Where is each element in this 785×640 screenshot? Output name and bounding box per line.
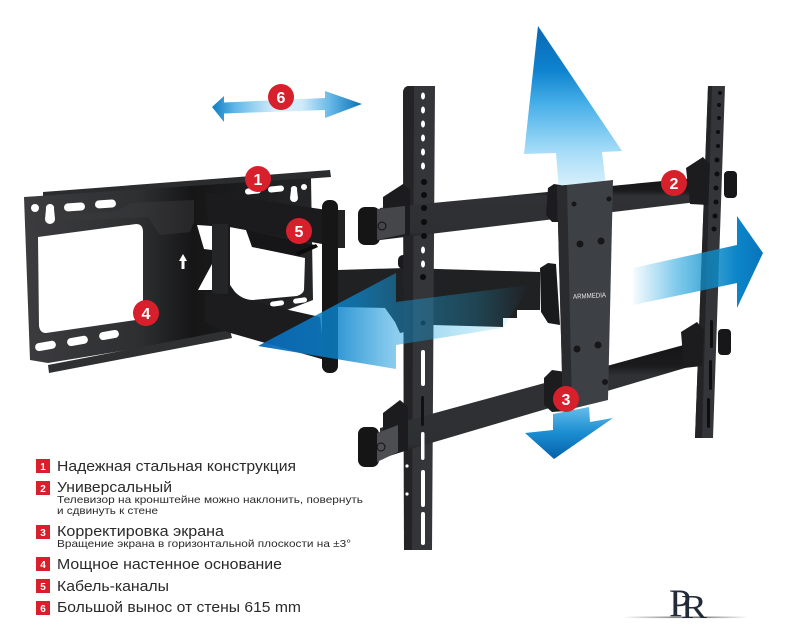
rail holes right — [707, 91, 722, 428]
window between plate and arms — [197, 225, 212, 290]
legend item 5: Кабель-каналы — [57, 579, 169, 595]
badge 5: 5 — [295, 224, 304, 241]
legend — [36, 459, 364, 616]
upper arm — [205, 192, 327, 244]
rail holes left — [405, 92, 425, 545]
arrow: tilt up — [524, 26, 622, 190]
badge 5 — [286, 218, 312, 244]
slots lower right — [270, 300, 284, 307]
keyholes and slots — [31, 184, 307, 352]
badge 3 — [553, 386, 579, 412]
legend item 1: 1 — [40, 462, 46, 473]
inner pivot — [212, 224, 228, 294]
logo PR: R — [681, 589, 707, 626]
rail clamps — [383, 157, 710, 458]
badge 3: 3 — [562, 392, 571, 409]
arrow: tilt down — [525, 407, 613, 459]
legend item 3: Вращение экрана в горизонтальной плоскости на ±3° — [57, 538, 351, 550]
legend item 4: 4 — [40, 560, 46, 571]
badge 1: 1 — [254, 172, 263, 189]
TV mount — [358, 86, 737, 550]
top flange — [43, 170, 331, 198]
brand text: ARMMEDIA — [573, 292, 607, 301]
right rail — [695, 86, 725, 438]
legend item 6: 6 — [40, 604, 46, 615]
logo PR — [623, 582, 748, 626]
rail knob — [398, 255, 412, 269]
legend item 4: Мощное настенное основание — [57, 557, 282, 573]
legend item 6: Большой вынос от стены 615 mm — [57, 600, 301, 616]
cable channel — [246, 230, 315, 256]
bottom flange — [48, 330, 232, 373]
legend item 5: 5 — [40, 582, 46, 593]
elbow pivot — [322, 200, 338, 373]
badge 2 — [661, 170, 687, 196]
right window — [230, 227, 305, 300]
legend item 2: Телевизор на кронштейне можно наклонить, повернуть — [57, 494, 364, 506]
upper bar — [380, 177, 705, 240]
badge 6: 6 — [277, 90, 286, 107]
legend item 3 — [36, 524, 351, 550]
swing arms — [205, 192, 560, 373]
wall plate body — [24, 178, 313, 363]
lower bar — [380, 340, 702, 458]
badge 1 — [245, 166, 271, 192]
arrow: forward — [258, 273, 530, 369]
logo PR: P — [669, 582, 691, 625]
left end caps — [358, 207, 380, 245]
lower arm — [205, 291, 325, 360]
left rail — [403, 86, 435, 550]
legend item 2: 2 — [40, 484, 46, 495]
arrow: top movement indicator 6 — [212, 91, 362, 122]
legend item 3: 3 — [40, 528, 46, 539]
long arm to TV plate — [338, 268, 540, 333]
central plate — [557, 180, 613, 411]
plate contour — [66, 200, 194, 235]
legend item 3: Корректировка экрана — [57, 524, 225, 540]
legend item 2 — [36, 480, 364, 517]
badge 6 — [268, 84, 294, 110]
badge 4: 4 — [142, 306, 151, 323]
central plate side brackets — [544, 184, 566, 412]
tilt joint — [540, 263, 560, 325]
wall plate bracket — [24, 170, 331, 373]
badge 4 — [133, 300, 159, 326]
legend item 1: Надежная стальная конструкция — [57, 459, 296, 475]
legend item 2: и сдвинуть к стене — [57, 505, 158, 517]
badge 2: 2 — [670, 176, 679, 193]
legend item 2: Универсальный — [57, 480, 172, 496]
arrow: right — [633, 216, 763, 308]
up arrow mark — [179, 254, 187, 269]
plate bolts — [572, 196, 612, 385]
right end caps — [724, 171, 737, 198]
